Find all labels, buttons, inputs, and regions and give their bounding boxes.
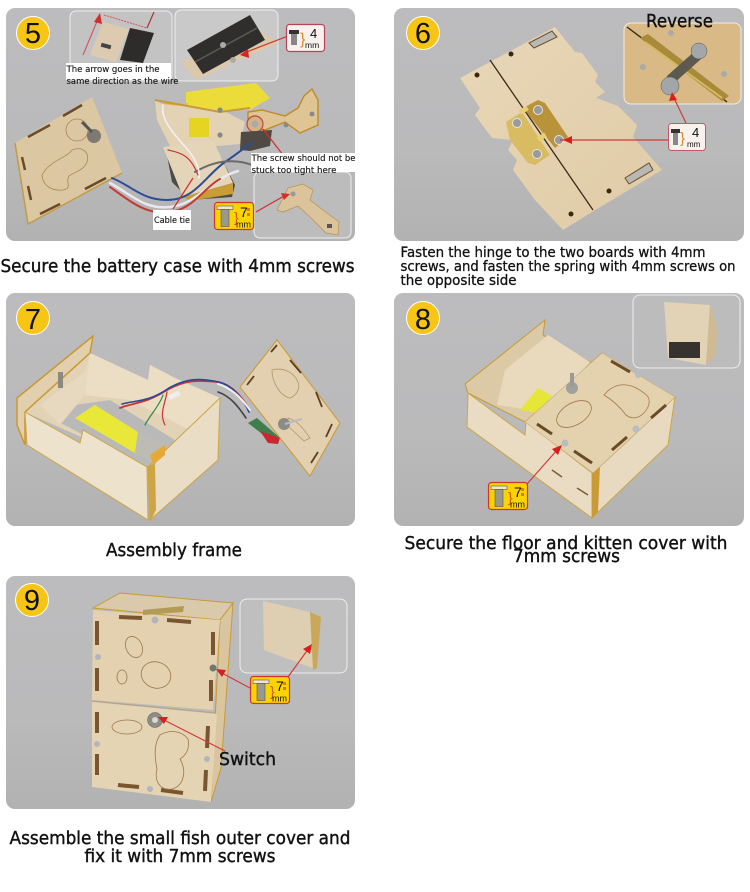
- icon: open box frame: [17, 336, 250, 522]
- panel: step 8 floor and cover: [394, 293, 744, 526]
- inset: back of box: [633, 295, 740, 368]
- caption: step 6: [400, 245, 736, 289]
- icon: badge number 9: [16, 584, 48, 617]
- icon: closed box with cover: [465, 320, 675, 518]
- panel: step 9 outer cover: [6, 576, 355, 809]
- label: screw tightness note: stuck too tight here: [252, 166, 336, 176]
- caption: step 9: [10, 829, 350, 867]
- label: 4mm screw: [286, 24, 324, 52]
- label: 7mm screw: mm: [236, 220, 251, 230]
- label: 7mm screw: [214, 202, 254, 230]
- label: 4mm screw: }: [680, 130, 685, 147]
- label: 7mm screw: }: [270, 683, 275, 699]
- caption: step 6: the opposite side: [400, 273, 517, 289]
- label: screw tightness note: [251, 129, 356, 176]
- inset: arrow direction: [70, 11, 172, 81]
- arrows: 4mm screw pointers: [560, 92, 686, 144]
- caption: step 9: Assemble the small fish outer cover and: [10, 829, 350, 849]
- inset: lever detail: [254, 172, 351, 238]
- label: 7mm screw: mm: [272, 694, 287, 704]
- icon: badge number 6: 6: [415, 18, 431, 50]
- panel: step 7 frame: [6, 293, 355, 526]
- label: 4mm screw: mm: [305, 40, 319, 50]
- label: 7mm screw: 7: [276, 678, 284, 694]
- label: 7mm screw: mm: [510, 500, 525, 510]
- icon: badge number 7: 7: [25, 304, 41, 336]
- icon: assembled box: [92, 593, 233, 802]
- panel: step 6 hinge: [394, 8, 744, 241]
- label: 7mm screw: 7: [240, 204, 248, 220]
- icon: badge number 5: [16, 16, 50, 50]
- icon: badge number 5: 5: [25, 18, 41, 50]
- icon: kitten lid: [240, 340, 340, 476]
- caption: step 8: [404, 534, 728, 567]
- label: 4mm screw: mm: [687, 140, 701, 149]
- icon: kitten lid board: [15, 97, 122, 224]
- label: cable tie: [153, 178, 193, 230]
- icon: badge number 9: 9: [24, 585, 40, 617]
- label: 4mm screw: 4: [310, 26, 317, 41]
- label: arrow direction note: [66, 63, 178, 87]
- caption: step 8: Secure the floor and kitten cover with: [404, 534, 728, 554]
- inset: reverse detail: [624, 23, 741, 104]
- label: 4mm screw: 4: [692, 125, 699, 140]
- caption: step 8: 7mm screws: [513, 547, 620, 567]
- label: cable tie: Cable tie: [154, 216, 190, 226]
- inset: battery holder: [175, 10, 288, 81]
- label: 4mm screw: [668, 124, 706, 150]
- arrows: screw and switch pointers: [158, 644, 312, 751]
- panel: step 5 battery case: [6, 8, 356, 241]
- arrow: screw pointer: [527, 445, 562, 484]
- label: 7mm screw: 7: [514, 484, 522, 500]
- caption: step 5: Secure the battery case with 4mm screws: [0, 257, 354, 277]
- label: arrow direction note: The arrow goes in the: [66, 65, 160, 75]
- icon: motor and lever assembly: [110, 83, 318, 213]
- label: arrow direction note: same direction as the wire: [66, 77, 178, 87]
- icon: badge number 8: [406, 302, 440, 336]
- label: reverse: Reverse: [646, 12, 713, 32]
- inset: side of cover: [240, 599, 347, 673]
- label: 7mm screw: [250, 676, 290, 704]
- icon: badge number 7: [16, 302, 50, 336]
- icon: badge number 8: 8: [415, 304, 431, 336]
- caption: step 7: Assembly frame: [106, 541, 242, 561]
- label: 7mm screw: }: [234, 209, 239, 225]
- label: switch: Switch: [219, 750, 276, 770]
- caption: step 9: fix it with 7mm screws: [84, 847, 276, 867]
- label: 4mm screw: }: [300, 31, 306, 48]
- icon: hinged boards: [460, 27, 662, 230]
- caption: step 6: Fasten the hinge to the two boards with 4mm: [400, 245, 706, 261]
- icon: badge number 6: [406, 16, 440, 50]
- label: screw tightness note: The screw should not be: [251, 154, 356, 164]
- label: 7mm screw: [488, 482, 528, 510]
- label: 7mm screw: }: [508, 489, 513, 505]
